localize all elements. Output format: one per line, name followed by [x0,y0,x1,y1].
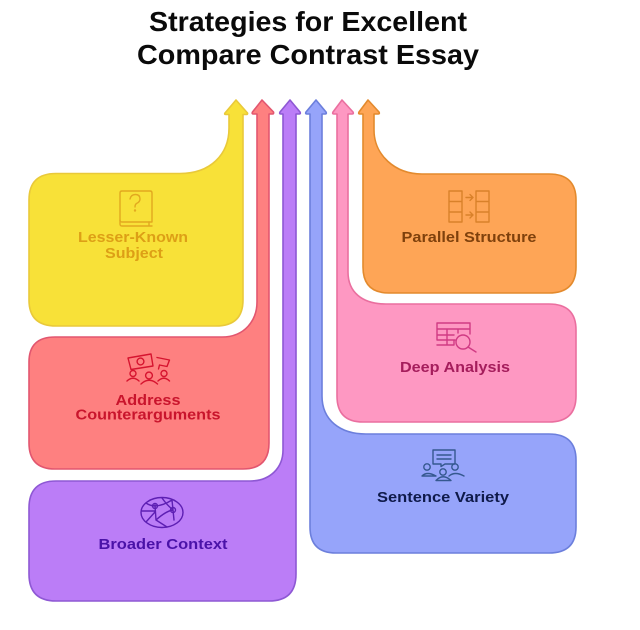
label line 2: Subject [105,246,163,262]
label: Deep Analysis [400,360,510,376]
title [137,6,479,70]
pink arrow panel [333,100,576,422]
icon: parallel columns [449,191,489,222]
label: Sentence Variety [377,490,509,506]
panel: parallel structure [359,100,576,293]
panel: deep analysis [333,100,576,422]
panel: sentence variety [306,100,576,553]
label: Lesser-Known [78,230,188,246]
panel: address counterarguments [29,100,274,469]
title: Compare Contrast Essay [137,39,479,70]
icon: question book [120,191,152,226]
icon: debate group [127,354,170,384]
blue arrow panel [306,100,576,553]
purple arrow panel [29,100,300,601]
label: Address [116,393,180,409]
label line 2: Counterarguments [76,408,220,424]
label: Broader Context [98,537,228,553]
yellow arrow panel [29,100,248,326]
icon: discussion group [422,450,464,480]
label: Parallel Structure [402,230,536,246]
icon: network globe [141,498,183,528]
panel: broader context [29,100,300,601]
title: Strategies for Excellent [149,6,467,37]
red arrow panel [29,100,274,469]
panel: lesser-known subject [29,100,248,326]
icon: table with magnifier [437,323,476,352]
orange arrow panel [359,100,576,293]
